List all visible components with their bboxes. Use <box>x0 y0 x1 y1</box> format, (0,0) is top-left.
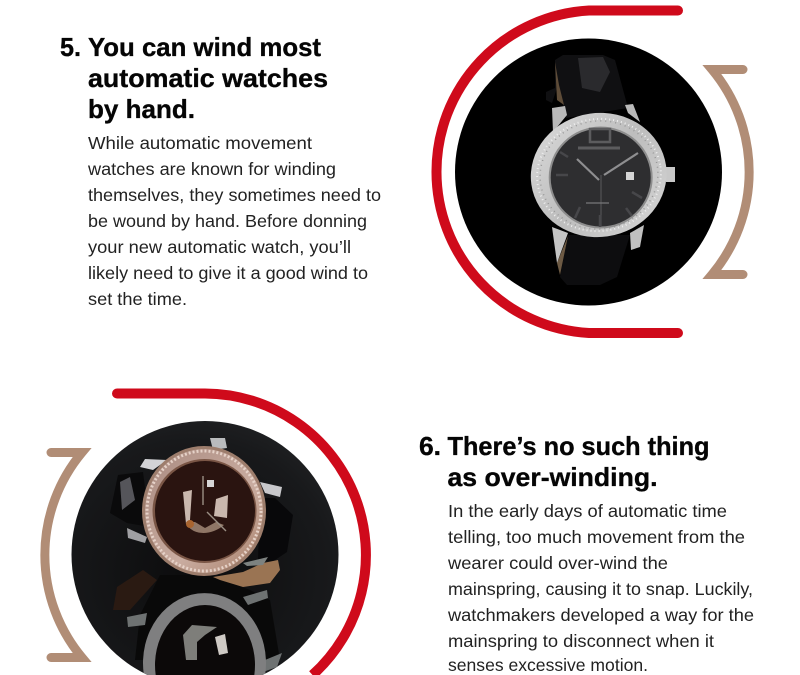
body text: fact 6: telling, too much movement from the <box>448 527 745 547</box>
icon: rose gold watch with reflection <box>110 438 293 675</box>
heading: fact 5: You can wind most <box>88 32 321 62</box>
heading: fact 5: by hand. <box>88 94 195 124</box>
body text: fact 6: mainspring to disconnect when it <box>448 631 714 651</box>
body text: fact 6: senses excessive motion. <box>448 655 648 675</box>
heading: fact 5: automatic watches <box>88 63 328 93</box>
body text: fact 5: While automatic movement <box>88 133 312 153</box>
tan bracket <box>45 452 82 658</box>
red arc frame <box>436 10 678 333</box>
main case <box>142 446 266 576</box>
heading: fact 6: There’s no such thing <box>448 431 710 461</box>
black circle backdrop <box>455 38 722 306</box>
body text: fact 5 <box>87 133 381 309</box>
body text: fact 6: wearer could over-wind the <box>447 553 668 573</box>
panel: fact 6 watch image <box>45 388 366 675</box>
heading: fact 5: 5. <box>60 32 81 62</box>
red arc start cap <box>112 388 122 398</box>
body text: fact 5: be wound by hand. Before donning <box>88 211 367 231</box>
tan bracket <box>712 70 749 274</box>
panel: fact 5 watch image <box>436 10 749 333</box>
panel: fact 5 text <box>60 32 381 309</box>
dark circle backdrop <box>72 421 338 675</box>
body text: fact 6 <box>447 501 754 675</box>
body text: fact 5: set the time. <box>88 289 187 309</box>
heading: fact 6: 6. <box>419 431 441 461</box>
body text: fact 6: In the early days of automatic time <box>448 501 727 521</box>
heading: fact 6: as over-winding. <box>448 462 658 492</box>
body text: fact 5: watches are known for winding <box>87 159 336 179</box>
body text: fact 5: likely need to give it a good wind to <box>88 263 368 283</box>
panel: fact 6 text <box>419 431 754 675</box>
body text: fact 6: watchmakers developed a way for the <box>447 605 754 625</box>
heading: fact 6 <box>419 431 710 492</box>
body text: fact 5: your new automatic watch, you’ll <box>88 237 351 257</box>
body text: fact 5: themselves, they sometimes need to <box>88 185 381 205</box>
body text: fact 6: mainspring, causing it to snap. Luckily, <box>448 579 753 599</box>
red arc frame <box>117 394 366 675</box>
reflection <box>127 590 282 672</box>
icon: silver watch with black strap <box>523 55 675 285</box>
heading: fact 5 <box>60 32 328 124</box>
